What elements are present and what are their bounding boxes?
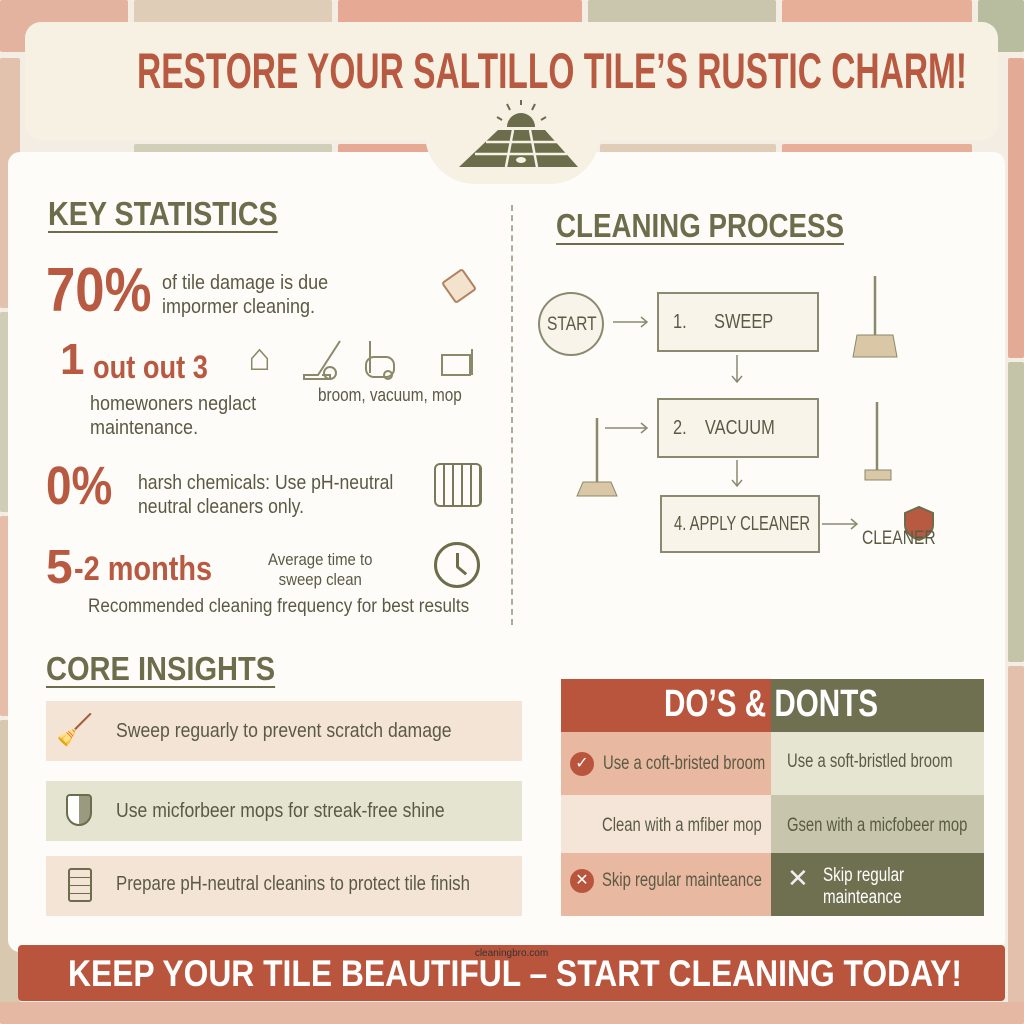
stat 5-2 months: sweep clean xyxy=(279,570,362,589)
stat 5-2 months: -2 months xyxy=(74,550,212,588)
stat 0%: 0% xyxy=(46,456,112,516)
x icon: ✕ xyxy=(575,872,589,889)
stat 1 out of 3: maintenance. xyxy=(90,417,198,439)
stat 1 out of 3 xyxy=(60,335,473,439)
stat 70%: impormer cleaning. xyxy=(162,296,315,318)
stat 1 out of 3: out out 3 xyxy=(93,349,208,385)
dos and donts table: Skip regular mainteance xyxy=(602,870,762,891)
heading: core insights: CORE INSIGHTS xyxy=(46,650,275,687)
title: RESTORE YOUR SALTILLO TILE’S RUSTIC CHARM! xyxy=(137,43,967,99)
stat 1 out of 3: homewoners neglact xyxy=(90,393,256,415)
insight 1: Sweep reguarly to prevent scratch damage xyxy=(116,720,452,742)
flowchart: CLEANER xyxy=(862,528,936,549)
flowchart xyxy=(538,276,936,553)
stat 70%: 70% xyxy=(46,256,151,325)
icon: calendar xyxy=(434,463,482,507)
icon: clock xyxy=(434,542,480,588)
stat 1 out of 3: 1 xyxy=(60,335,84,384)
footer banner xyxy=(18,945,1005,1001)
stat 5-2 months: Recommended cleaning frequency for best results xyxy=(88,596,469,617)
stat 1 out of 3: broom, vacuum, mop xyxy=(318,385,462,405)
insight 2 xyxy=(46,781,522,841)
x icon xyxy=(570,869,594,893)
flowchart: 1. SWEEP xyxy=(673,311,773,333)
start node xyxy=(538,292,604,356)
heading: key statistics: KEY STATISTICS xyxy=(48,195,278,232)
icons: house, vacuums: ⌂ xyxy=(248,337,271,379)
divider xyxy=(511,205,513,625)
flowchart: 2. VACUUM xyxy=(673,417,775,439)
check icon xyxy=(570,752,594,776)
dos and donts table: mainteance xyxy=(823,887,902,908)
stat 5-2 months: 5 xyxy=(46,541,73,594)
insight 3: Prepare pH-neutral cleanins to protect tile finish xyxy=(116,873,470,895)
flowchart: 4. APPLY CLEANER xyxy=(674,513,810,535)
dos and donts table: Use a soft-bristled broom xyxy=(787,751,953,772)
footer banner: KEEP YOUR TILE BEAUTIFUL – START CLEANING TODAY! xyxy=(68,953,962,994)
dos and donts table: ✕ xyxy=(787,863,809,893)
stat 0%: harsh chemicals: Use pH-neutral xyxy=(138,472,393,494)
stat 5-2 months xyxy=(46,541,480,617)
dos and donts table: Gsen with a micfobeer mop xyxy=(787,815,967,836)
heading: cleaning process: CLEANING PROCESS xyxy=(556,207,844,244)
check icon: ✓ xyxy=(575,755,589,772)
icon: sun over tiles xyxy=(425,100,600,184)
dos and donts table: DO’S & DONTS xyxy=(664,683,878,725)
dos and donts table: Clean with a mfiber mop xyxy=(602,815,762,836)
insight 2: Use micforbeer mops for streak-free shine xyxy=(116,800,445,822)
dos and donts table: Skip regular xyxy=(823,865,904,886)
main panel xyxy=(8,152,1005,952)
stat 5-2 months: Average time to xyxy=(268,550,373,569)
stat 0% xyxy=(46,456,482,518)
insight 3 xyxy=(46,856,522,916)
dos and donts table: Use a coft-bristed broom xyxy=(603,753,765,774)
header panel xyxy=(25,22,998,140)
dos and donts table xyxy=(561,679,984,916)
start node: START xyxy=(547,314,597,335)
stat 0%: neutral cleaners only. xyxy=(138,496,304,518)
stat 70% xyxy=(46,256,476,325)
footer banner: cleaningbro.com xyxy=(475,948,548,959)
insight 1: 🧹 xyxy=(56,714,93,747)
insight 1 xyxy=(46,701,522,761)
icon: broken tile xyxy=(441,268,477,304)
stat 70%: of tile damage is due xyxy=(162,272,328,294)
